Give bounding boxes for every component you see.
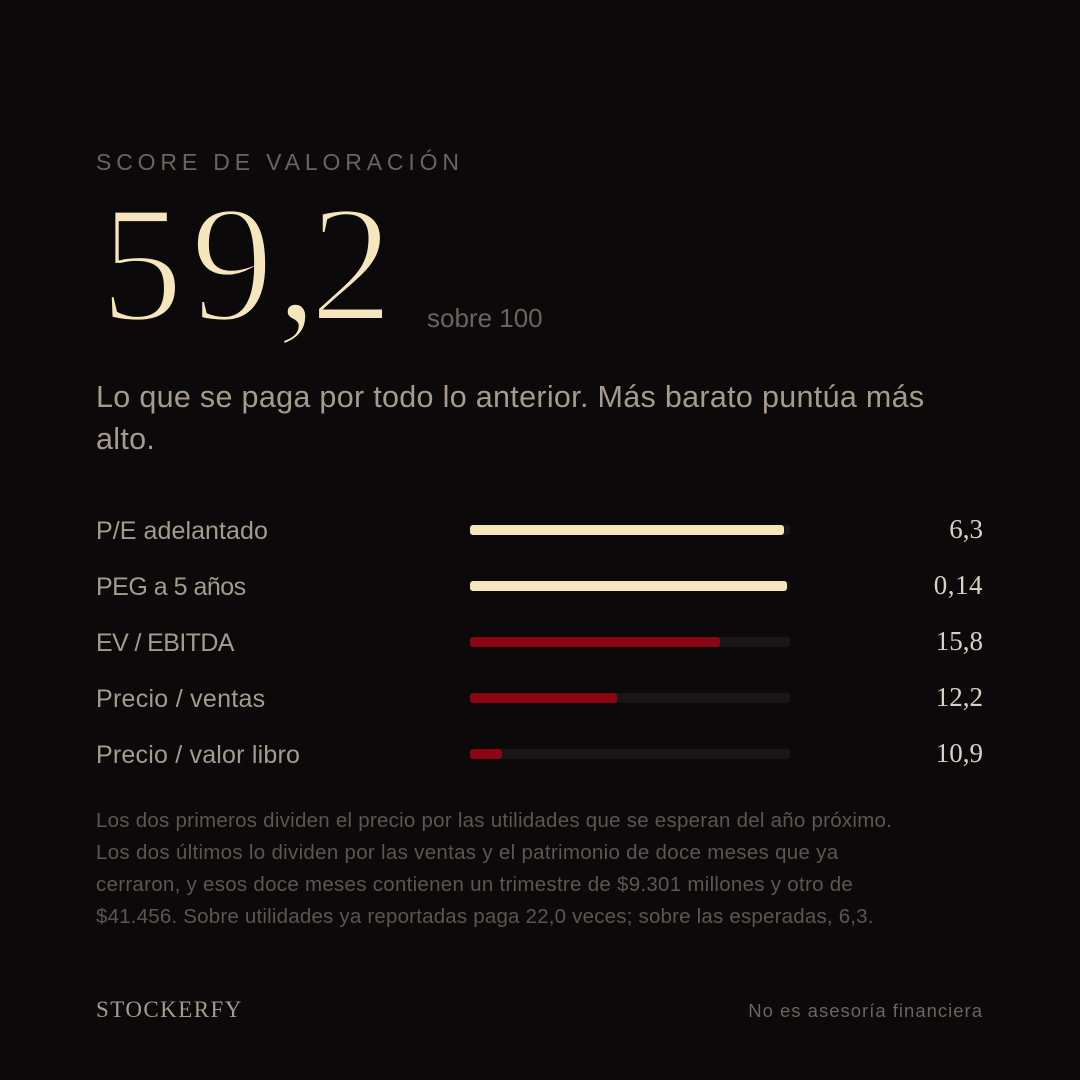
description [96,380,924,456]
bar [470,525,790,535]
label: Precio / valor libro [96,741,300,769]
value: 12,2 [936,682,983,712]
label: PEG a 5 años [96,573,246,601]
explanatory note: Los dos últimos lo dividen por las ventas y el patrimonio de doce meses que ya [96,841,838,864]
metric: PEG a 5 años [96,570,983,601]
value: 10,9 [936,738,983,768]
bar [470,693,790,703]
metric: EV / EBITDA [96,626,983,657]
eyebrow heading: SCORE DE VALORACIÓN [96,149,464,175]
disclaimer: No es asesoría financiera [748,1000,983,1021]
metric: Precio / ventas [96,682,983,713]
explanatory note: $41.456. Sobre utilidades ya reportadas paga 22,0 veces; sobre las esperadas, 6,3. [96,905,874,928]
description: Lo que se paga por todo lo anterior. Más barato puntúa más [96,380,924,414]
description: alto. [96,422,155,456]
big score number: 59,2 [100,172,393,357]
value: 6,3 [949,514,983,544]
value: 0,14 [934,570,983,600]
bar [470,749,790,759]
metric: P/E adelantado [96,514,983,545]
label: EV / EBITDA [96,629,234,657]
score scale: sobre 100 [427,303,543,333]
brand: STOCKERFY [96,997,243,1022]
label: P/E adelantado [96,517,268,545]
explanatory note: cerraron, y esos doce meses contienen un trimestre de $9.301 millones y otro de [96,873,853,896]
bar [470,637,790,647]
metric: Precio / valor libro [96,738,983,769]
explanatory note: Los dos primeros dividen el precio por las utilidades que se esperan del año próximo. [96,809,892,832]
value: 15,8 [936,626,983,656]
explanatory note [96,809,892,928]
label: Precio / ventas [96,685,265,713]
bar [470,581,790,591]
